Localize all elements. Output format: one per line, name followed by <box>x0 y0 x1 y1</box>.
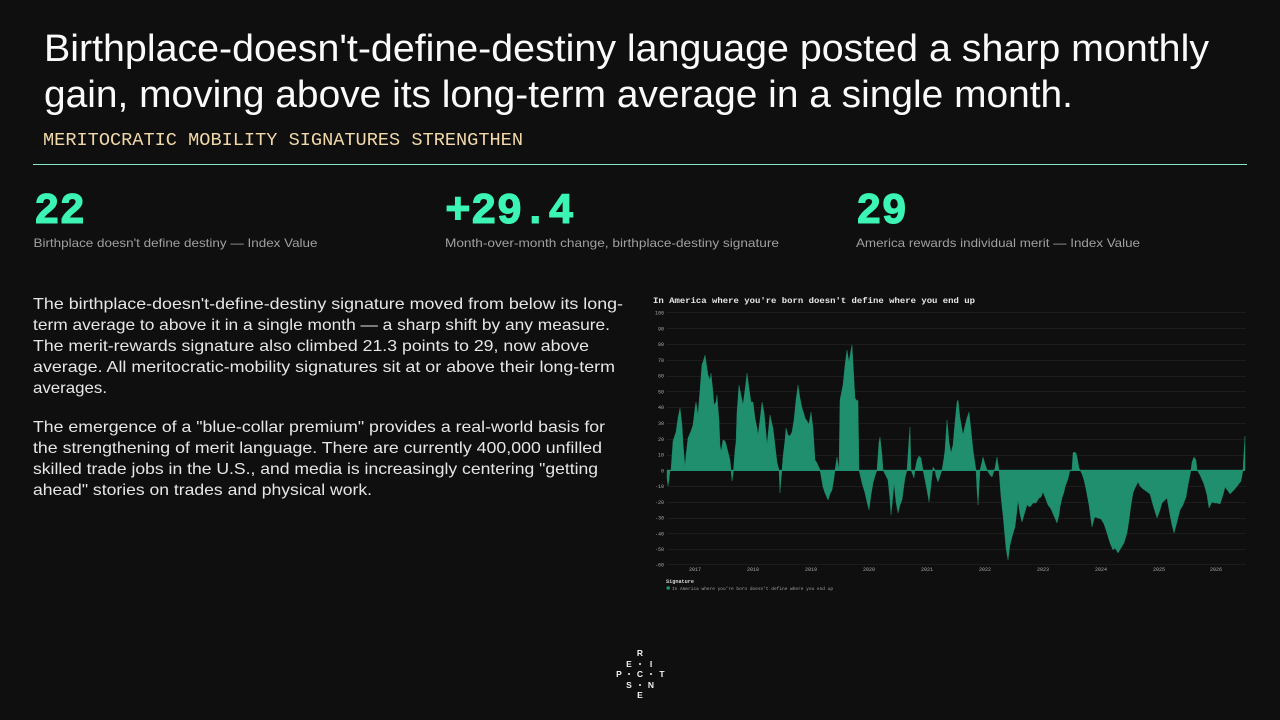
logo: lettered compass mark: N <box>648 680 654 690</box>
x axis labels: 2025 <box>1153 567 1165 573</box>
y axis labels: 80 <box>658 342 664 348</box>
logo: lettered compass mark: R <box>637 648 643 658</box>
logo: lettered compass mark: T <box>659 669 665 679</box>
stat: month-over-month change: Month-over-month change, birthplace-destiny signature <box>445 236 779 250</box>
y axis labels: -20 <box>655 500 664 506</box>
y axis labels: 70 <box>658 358 664 364</box>
stat: merit index value: America rewards individual merit — Index Value <box>856 236 1140 250</box>
y axis labels: 20 <box>658 437 664 443</box>
body text: first paragraph: average. All meritocratic-mobility signatures sit at or above their long-term <box>33 359 615 376</box>
body text: first paragraph <box>33 296 623 397</box>
body text: first paragraph: The merit-rewards signature also climbed 21.3 points to 29, now above <box>33 338 589 355</box>
stat: birthplace index value: 22 <box>34 187 85 237</box>
body text: first paragraph: averages. <box>33 380 107 397</box>
y axis labels: 40 <box>658 405 664 411</box>
stat: birthplace index value <box>34 187 318 250</box>
gridlines <box>667 312 1246 564</box>
body text: second paragraph: The emergence of a "blue-collar premium" provides a real-world basis for <box>33 419 606 436</box>
stat: birthplace index value: Birthplace doesn't define destiny — Index Value <box>34 236 318 250</box>
logo: lettered compass mark: P <box>616 669 622 679</box>
logo: lettered compass mark: C <box>637 669 643 679</box>
y axis labels: 60 <box>658 374 664 380</box>
logo: lettered compass mark <box>616 648 665 700</box>
x axis labels: 2020 <box>863 567 875 573</box>
logo: lettered compass mark: I <box>650 659 652 669</box>
logo: lettered compass mark: E <box>637 690 643 700</box>
subtitle: MERITOCRATIC MOBILITY SIGNATURES STRENGTHEN <box>43 131 523 151</box>
body text: first paragraph: The birthplace-doesn't-define-destiny signature moved from below its long- <box>33 296 623 313</box>
body text: second paragraph: ahead" stories on trades and physical work. <box>33 482 372 499</box>
y axis labels: 50 <box>658 389 664 395</box>
area series <box>667 345 1245 560</box>
body text: second paragraph: skilled trade jobs in the U.S., and media is increasingly centering "getting <box>33 461 598 478</box>
body text: first paragraph: term average to above it in a single month — a sharp shift by any measure. <box>33 317 610 334</box>
y axis labels: -50 <box>655 547 664 553</box>
x axis labels: 2017 <box>689 567 701 573</box>
legend: Signature <box>666 579 694 585</box>
y axis labels: -30 <box>655 516 664 522</box>
y axis labels <box>655 310 664 568</box>
x axis labels: 2021 <box>921 567 933 573</box>
y axis labels: 10 <box>658 452 664 458</box>
x axis labels: 2023 <box>1037 567 1049 573</box>
y axis labels: -60 <box>655 562 664 568</box>
x axis labels: 2024 <box>1095 567 1107 573</box>
stat: month-over-month change: +29.4 <box>445 187 574 237</box>
logo: lettered compass mark: S <box>626 680 632 690</box>
y axis labels: -10 <box>655 484 664 490</box>
stat: month-over-month change <box>445 187 779 250</box>
title: gain, moving above its long-term average in a single month. <box>44 74 1073 116</box>
legend: In America where you're born doesn't define where you end up <box>672 586 833 592</box>
x axis labels: 2018 <box>747 567 759 573</box>
legend <box>666 579 833 592</box>
body text: second paragraph: the strengthening of merit language. There are currently 400,000 unfilled <box>33 440 602 457</box>
title <box>44 28 1209 116</box>
y axis labels: -40 <box>655 531 664 537</box>
stat: merit index value <box>856 187 1140 250</box>
chart title: In America where you're born doesn't define where you end up <box>653 296 975 306</box>
x axis labels <box>689 567 1222 573</box>
x axis labels: 2019 <box>805 567 817 573</box>
y axis labels: 90 <box>658 326 664 332</box>
body text: second paragraph <box>33 419 606 499</box>
y axis labels: 0 <box>661 468 664 474</box>
zero line <box>667 470 1245 472</box>
y axis labels: 30 <box>658 421 664 427</box>
stat: merit index value: 29 <box>856 187 907 237</box>
logo: lettered compass mark: E <box>626 659 632 669</box>
y axis labels: 100 <box>655 310 664 316</box>
x axis labels: 2026 <box>1210 567 1222 573</box>
title: Birthplace-doesn't-define-destiny language posted a sharp monthly <box>44 28 1209 70</box>
area chart: in America where you're born doesn't define where you end up <box>653 296 1246 592</box>
x axis labels: 2022 <box>979 567 991 573</box>
